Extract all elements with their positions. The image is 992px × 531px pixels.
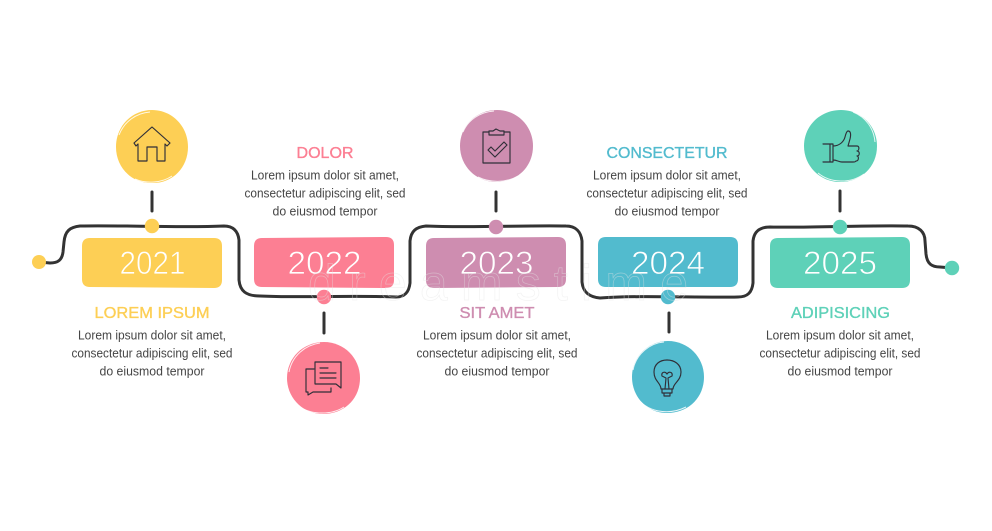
heading: LOREM IPSUM <box>94 305 210 322</box>
year box <box>598 237 738 287</box>
step 2024 <box>586 145 748 413</box>
heading: ADIPISICING <box>791 305 890 322</box>
connector <box>322 313 326 333</box>
watermark: dreamstime <box>308 255 688 311</box>
end dot <box>945 261 959 275</box>
icon circle: thumbs up <box>804 110 877 182</box>
icon circle: house <box>116 110 188 183</box>
step 2025 <box>760 110 959 378</box>
connector <box>838 191 842 211</box>
node dot <box>145 219 159 233</box>
node dot <box>317 290 331 304</box>
node dot <box>661 290 675 304</box>
heading: DOLOR <box>296 145 354 162</box>
description: do eiusmod tempor <box>100 364 205 378</box>
year box <box>426 237 566 288</box>
connector <box>668 313 670 332</box>
description: Lorem ipsum dolor sit amet, <box>593 168 741 182</box>
description: do eiusmod tempor <box>614 204 720 218</box>
description: consectetur adipiscing elit, sed <box>416 346 578 360</box>
node dot <box>833 220 847 234</box>
description <box>72 328 232 378</box>
description: consectetur adipiscing elit, sed <box>244 186 406 200</box>
year: 2024 <box>631 245 705 281</box>
heading: CONSECTETUR <box>606 145 728 162</box>
year box <box>254 237 394 288</box>
description: do eiusmod tempor <box>272 204 378 218</box>
start dot <box>32 255 46 269</box>
year box <box>770 237 910 288</box>
year: 2023 <box>460 245 534 281</box>
description: consectetur adipiscing elit, sed <box>760 346 920 360</box>
node dot <box>489 220 503 234</box>
connector <box>494 192 498 211</box>
description <box>416 328 578 378</box>
step 2022 <box>244 145 406 414</box>
description: consectetur adipiscing elit, sed <box>72 346 232 360</box>
description <box>760 328 920 378</box>
description: Lorem ipsum dolor sit amet, <box>251 168 399 182</box>
description: consectetur adipiscing elit, sed <box>586 186 748 200</box>
icon circle: light bulb <box>632 341 704 413</box>
step 2023 <box>416 110 578 378</box>
icon circle: speech bubbles <box>287 342 360 414</box>
year: 2022 <box>288 245 362 281</box>
description <box>244 168 406 218</box>
step 2021 <box>32 110 232 378</box>
description: do eiusmod tempor <box>788 364 893 378</box>
year: 2021 <box>120 245 186 281</box>
year box <box>82 238 222 288</box>
connector <box>150 192 154 211</box>
heading: SIT AMET <box>460 305 535 322</box>
icon circle: clipboard <box>460 110 533 182</box>
timeline line <box>39 226 952 298</box>
description: do eiusmod tempor <box>444 364 550 378</box>
year: 2025 <box>803 245 877 281</box>
description <box>586 168 748 218</box>
description: Lorem ipsum dolor sit amet, <box>423 328 571 342</box>
description: Lorem ipsum dolor sit amet, <box>78 328 226 342</box>
description: Lorem ipsum dolor sit amet, <box>766 328 914 342</box>
